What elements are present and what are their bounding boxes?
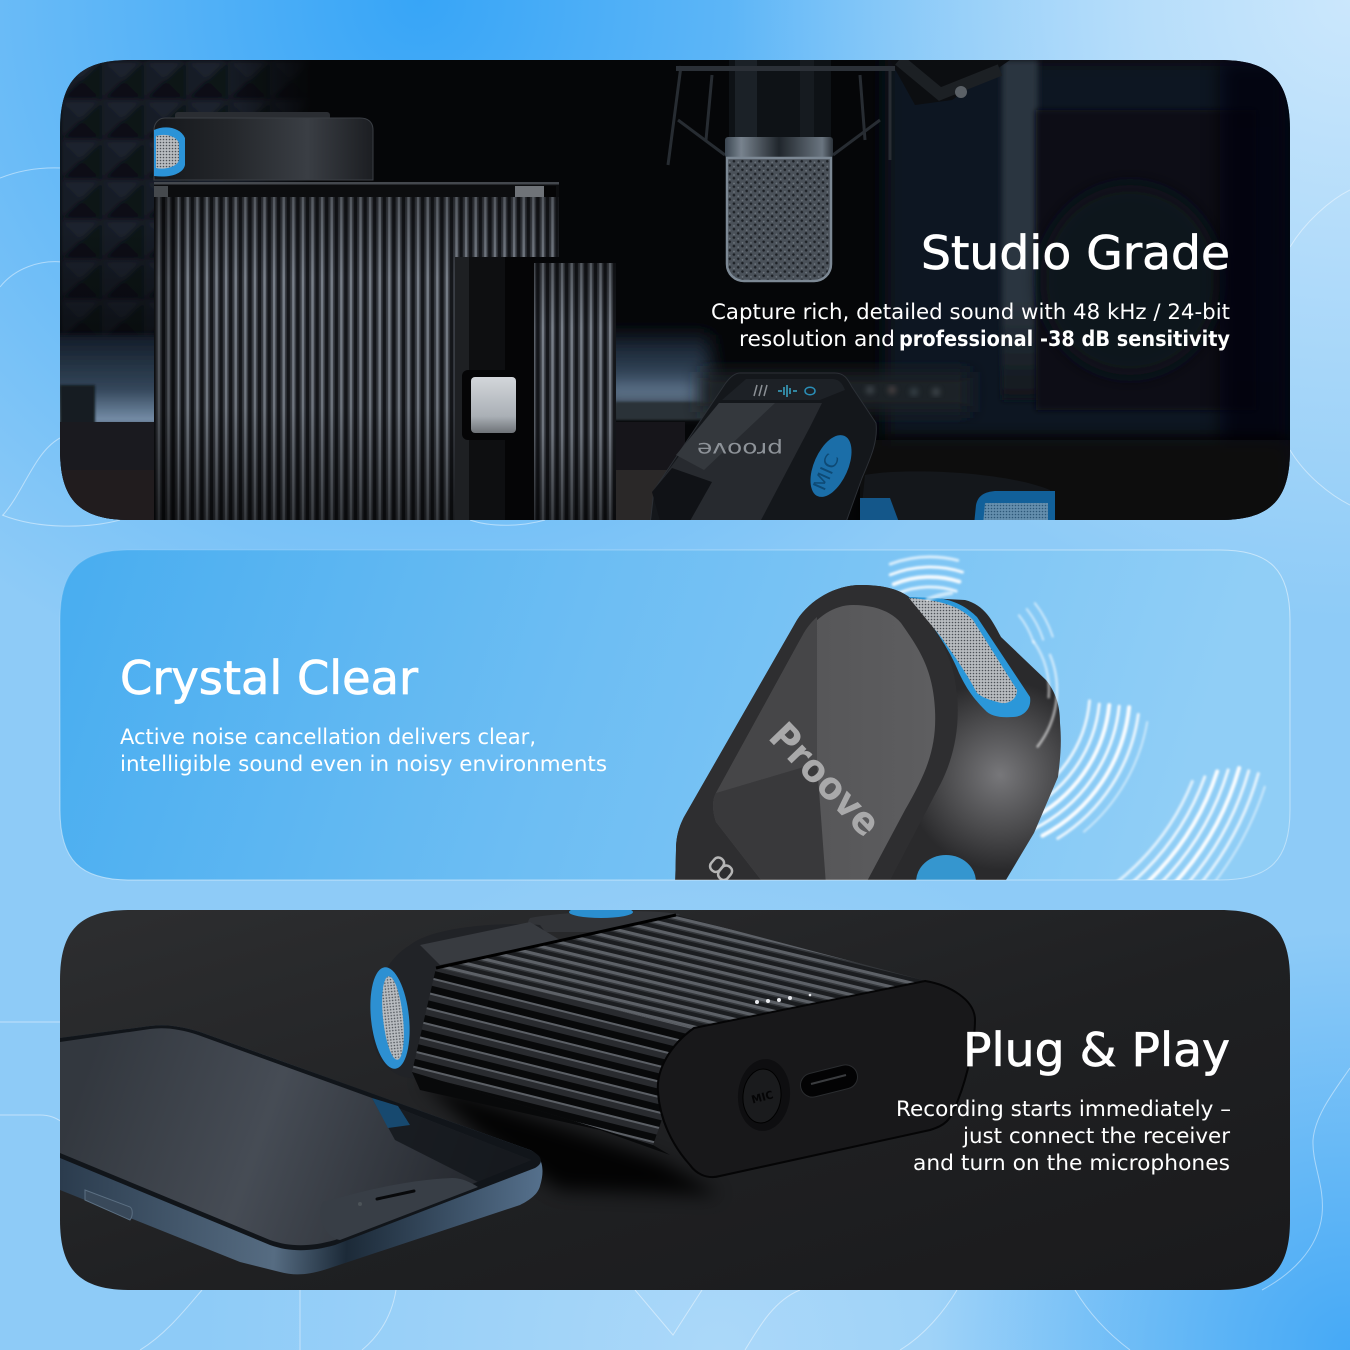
text: Plug & Play bbox=[896, 1023, 1231, 1176]
brand text on small transmitter: proove bbox=[697, 438, 783, 460]
microphone device bbox=[675, 585, 1061, 880]
studio backdrop bbox=[50, 60, 1290, 530]
receiver body bbox=[366, 906, 975, 1177]
studio microphone bbox=[668, 60, 1010, 281]
panel: Studio Grade bbox=[50, 60, 1290, 530]
panel: Plug & Play bbox=[60, 906, 1290, 1290]
status icons bbox=[754, 385, 815, 397]
USB-C port bbox=[800, 1064, 858, 1098]
text: Crystal Clear: Active noise cancellation delivers clear, bbox=[120, 725, 536, 750]
Proove logo: Proove bbox=[761, 714, 889, 845]
text: Plug & Play: Recording starts immediately – bbox=[896, 1097, 1231, 1122]
receiver front face bbox=[658, 981, 975, 1177]
microphone clipped on receiver bbox=[154, 112, 373, 180]
second transmitter bbox=[860, 471, 1055, 525]
small transmitter with MIC button bbox=[650, 373, 876, 525]
text: Studio Grade: Capture rich, detailed sound with 48 kHz / 24-bit bbox=[711, 300, 1230, 325]
glass screen bbox=[713, 605, 935, 885]
MIC label: MIC bbox=[809, 451, 844, 494]
panel: Crystal Clear bbox=[60, 550, 1267, 880]
power button bbox=[738, 1060, 790, 1130]
text: Plug & Play: just connect the receiver bbox=[962, 1124, 1230, 1149]
text: Studio Grade bbox=[711, 226, 1230, 352]
smartphone bbox=[60, 1025, 543, 1274]
blue ring and grille bbox=[909, 597, 1030, 717]
link icon bbox=[708, 856, 734, 880]
text: Crystal Clear: intelligible sound even in noisy environments bbox=[120, 752, 607, 777]
panel border bbox=[60, 550, 1290, 880]
text: Plug & Play: Plug & Play bbox=[963, 1023, 1230, 1077]
text: Plug & Play: and turn on the microphones bbox=[913, 1151, 1230, 1176]
receiver body: MIC bbox=[750, 1088, 775, 1107]
text: Studio Grade: Studio Grade bbox=[921, 226, 1230, 280]
text: Studio Grade: resolution and bbox=[739, 327, 895, 352]
text: Crystal Clear: Crystal Clear bbox=[120, 651, 418, 705]
text: Crystal Clear bbox=[120, 651, 607, 777]
text: Studio Grade: professional -38 dB sensitivity bbox=[899, 327, 1230, 351]
sound waves bbox=[888, 554, 1266, 880]
receiver with ribbed body bbox=[154, 182, 616, 523]
